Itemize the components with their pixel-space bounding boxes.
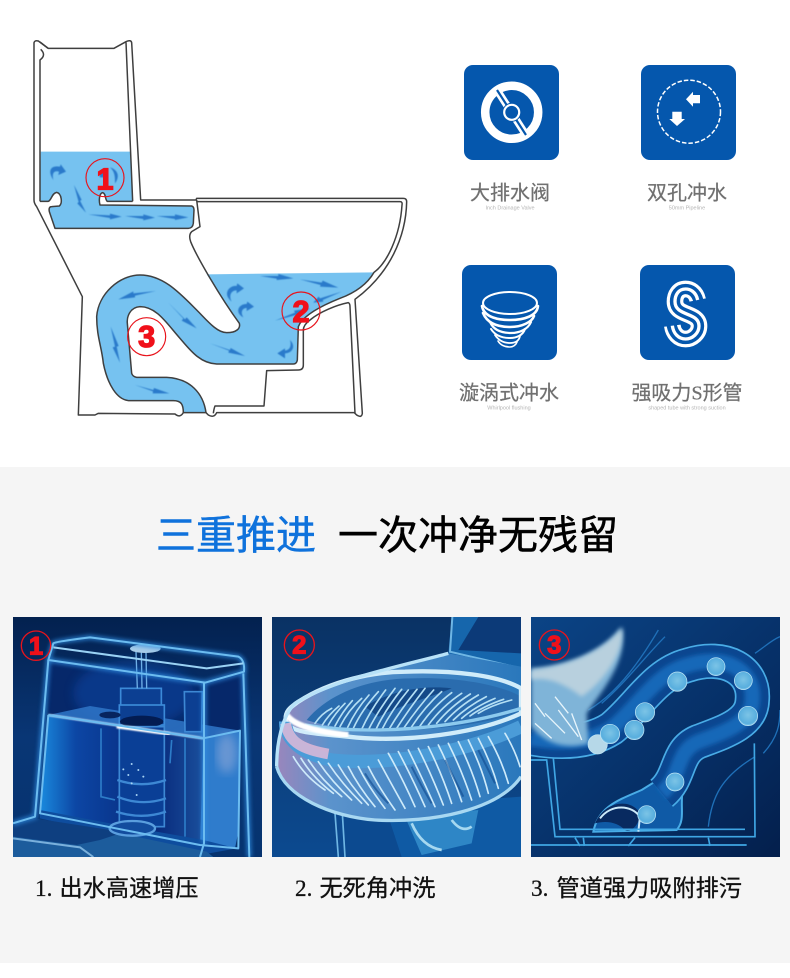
outer and inner outlines: [34, 41, 407, 416]
outer contour lines: [588, 630, 780, 827]
caption 1: 1.: [35, 876, 52, 902]
grey lower section background: [0, 467, 790, 963]
sublabel: Whirlpool flushing: [487, 406, 531, 412]
splash: [531, 627, 623, 746]
red marker 1: [86, 159, 124, 197]
badge 1: 1: [29, 632, 43, 660]
caption 1: 出水高速增压: [60, 875, 199, 901]
inner pipe opening: [633, 685, 730, 777]
rim: [286, 671, 521, 739]
bowl body: [277, 653, 521, 820]
swirl streaks bottom: [293, 733, 520, 810]
glass outline: [13, 637, 249, 857]
panel 3: S-trap photo: [531, 617, 780, 857]
label: 漩涡式冲水: [459, 382, 559, 404]
title: 一次冲净无残留: [338, 514, 618, 558]
feature: S-shaped pipe: [631, 265, 743, 412]
red marker 2: 2: [292, 295, 310, 329]
base: [13, 818, 116, 845]
base structure: [531, 743, 755, 846]
badge 2: 2: [292, 632, 306, 660]
glass outline glow: [13, 637, 249, 857]
title: 三重推进: [156, 514, 316, 558]
badge 2: [284, 630, 314, 660]
red marker 3: 3: [138, 320, 155, 354]
pedestal: [390, 796, 521, 857]
badge 3: 3: [547, 632, 561, 660]
S-trap pipe: [531, 661, 752, 793]
badge 1: [21, 631, 51, 660]
red marker 3: [128, 318, 166, 356]
sublabel: shaped tube with strong suction: [648, 406, 726, 412]
side valve: [184, 692, 202, 732]
water block: [48, 706, 240, 738]
toilet cross-section diagram: [34, 41, 407, 416]
feature: whirlpool flush: [459, 265, 559, 412]
bubbles: [122, 763, 144, 796]
tank and conduit water: [40, 152, 194, 228]
label: 大排水阀: [470, 182, 550, 204]
lower pipe chamber: [592, 782, 684, 833]
red marker 2: [282, 292, 320, 330]
feature: drainage valve: [464, 65, 559, 212]
water line glow: [48, 715, 203, 738]
sublabel: 50mm Pipeline: [669, 206, 705, 212]
panel 2: bowl photo: [272, 617, 521, 857]
flow arrows: [50, 164, 342, 393]
icon: S pipe: [640, 265, 735, 360]
swirl streaks top: [315, 688, 512, 730]
badge 3: [539, 630, 569, 660]
icon: tornado: [462, 265, 557, 360]
label: 双孔冲水: [647, 182, 727, 204]
red marker 1: 1: [96, 162, 114, 196]
caption 3: 3.: [531, 876, 548, 902]
panel 1: tank photo: [13, 617, 262, 857]
cylinder: [120, 688, 162, 704]
balls: [588, 658, 758, 824]
caption 2: 2.: [295, 876, 312, 902]
label: 强吸力S形管: [631, 382, 743, 404]
icon: valve: [464, 65, 559, 160]
bowl and S-trap water: [97, 272, 374, 413]
caption 3: 管道强力吸附排污: [556, 875, 742, 901]
bowl opening: [307, 678, 521, 730]
icon: dashed circle with arrows: [641, 65, 736, 160]
sublabel: Inch Drainage Valve: [485, 206, 535, 212]
caption 2: 无死角冲洗: [320, 875, 435, 901]
tank base: [448, 617, 521, 667]
feature: dual-hole flush: [641, 65, 736, 212]
